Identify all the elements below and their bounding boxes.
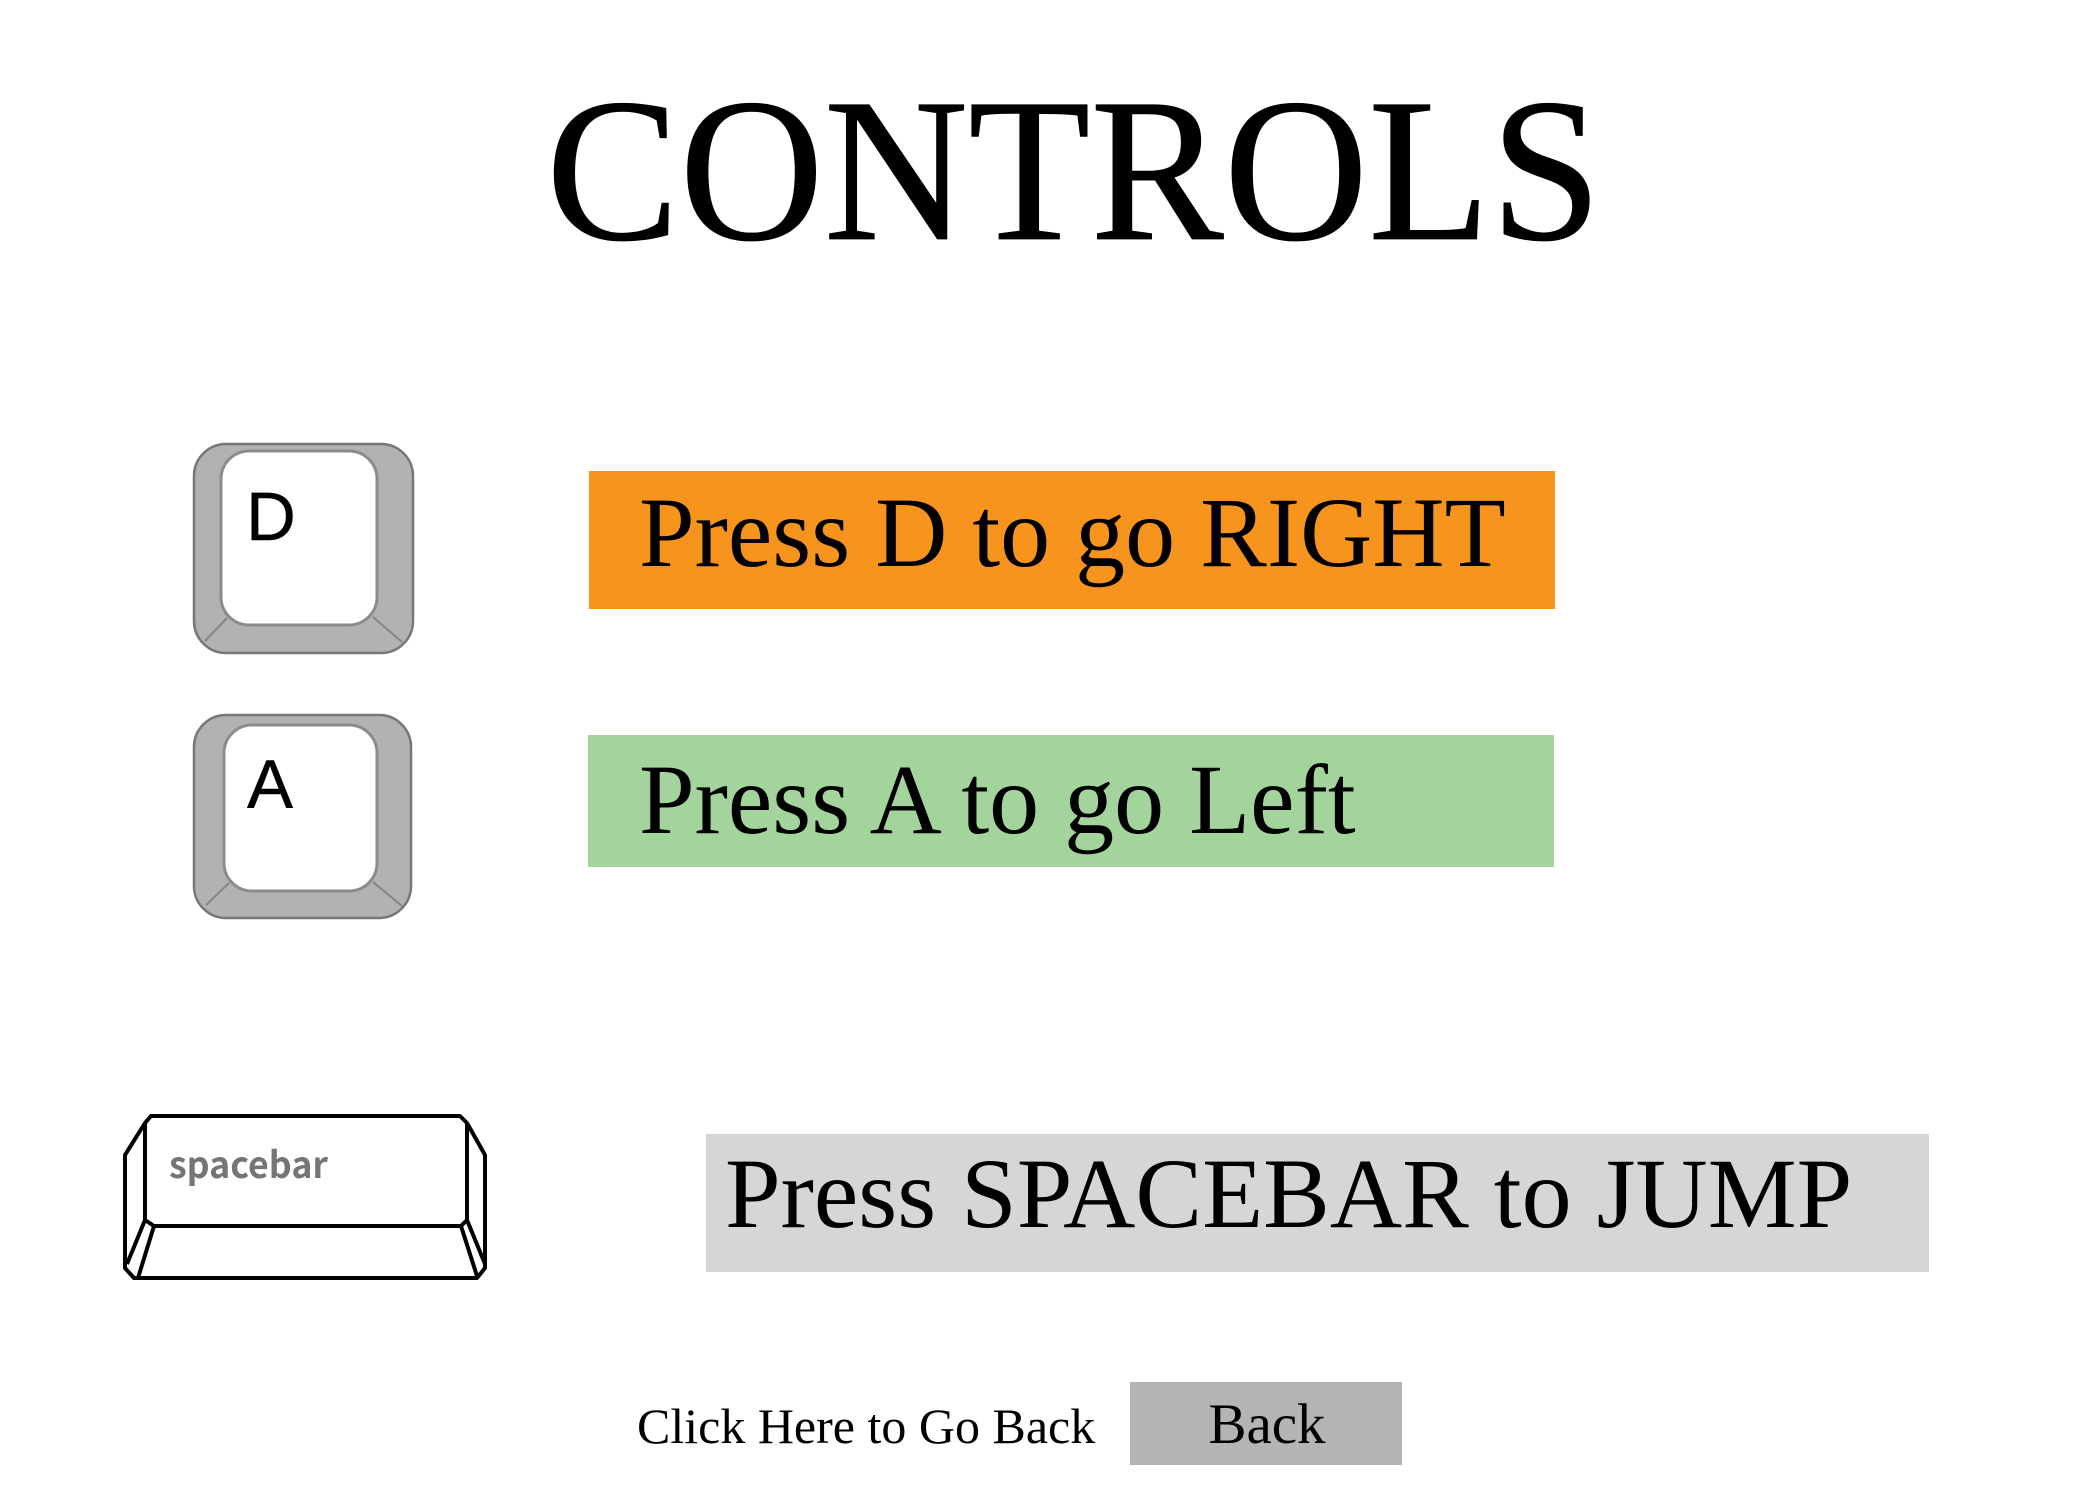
icon: A key: A	[247, 746, 293, 823]
icon: spacebar key: spacebar	[169, 1135, 329, 1189]
title: CONTROLS	[546, 57, 1602, 284]
button: back: Back	[1208, 1393, 1326, 1456]
panel: press spacebar: Press SPACEBAR to JUMP	[725, 1138, 1852, 1249]
panel: press D: Press D to go RIGHT	[639, 477, 1506, 588]
text: click here to go back: Click Here to Go Back	[637, 1398, 1095, 1454]
icon: D key	[194, 444, 413, 653]
icon: A key	[194, 715, 411, 918]
panel: press A	[588, 735, 1554, 867]
button: back	[1130, 1382, 1402, 1465]
icon: D key: D	[246, 478, 296, 555]
icon: spacebar key	[125, 1116, 485, 1278]
panel: press A: Press A to go Left	[639, 744, 1356, 855]
